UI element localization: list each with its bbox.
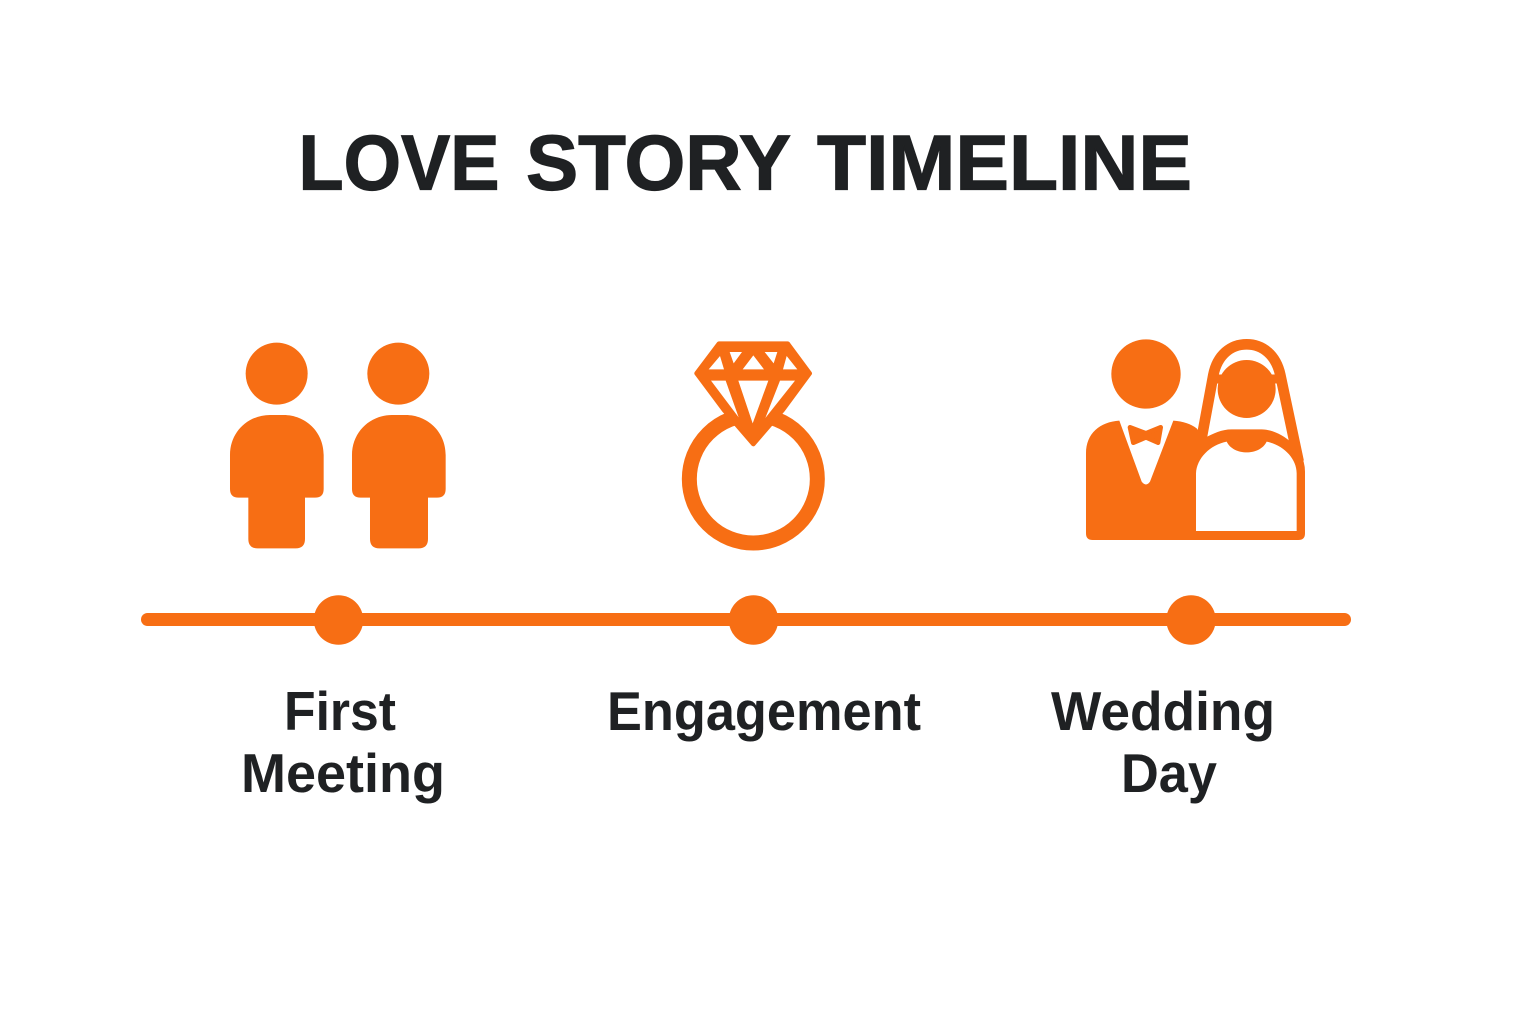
label: first meeting: First (284, 680, 396, 742)
label: first meeting (241, 680, 445, 804)
icon: diamond ring, engagement (689, 344, 817, 543)
label: wedding day: Wedding (1051, 680, 1275, 742)
marker: first meeting (314, 595, 363, 645)
label: engagement: Engagement (607, 680, 921, 742)
label: first meeting: Meeting (241, 742, 445, 804)
title: LOVE (298, 118, 500, 206)
marker: engagement (729, 595, 778, 645)
title: STORY (526, 118, 791, 206)
timeline line (141, 613, 1351, 626)
label: wedding day: Day (1121, 742, 1217, 804)
title (298, 118, 1192, 206)
title: TIMELINE (817, 118, 1192, 206)
label: wedding day (1051, 680, 1275, 804)
icon: two people, first meeting (230, 343, 446, 548)
marker: wedding day (1166, 595, 1216, 645)
icon: bride and groom, wedding day (1086, 339, 1305, 540)
